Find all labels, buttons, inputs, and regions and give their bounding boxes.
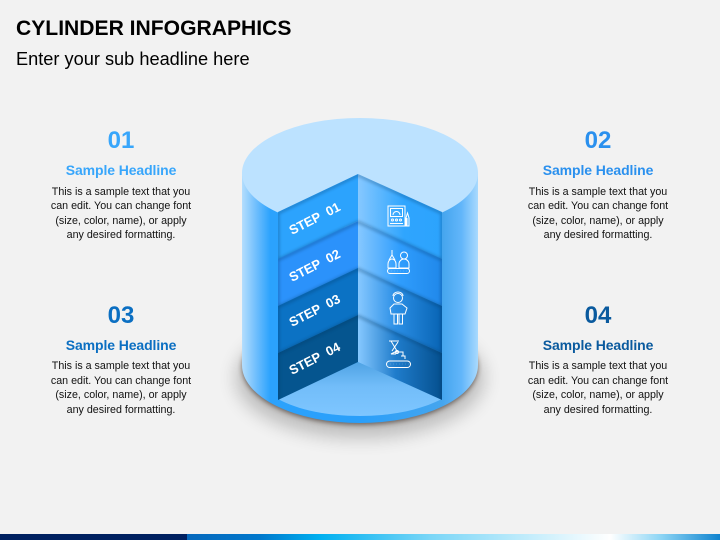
label step 03: STEP 03: [287, 291, 343, 330]
panel: step 01 text: [51, 127, 191, 241]
headline 01: Sample Headline: [66, 162, 176, 178]
headline 02: Sample Headline: [543, 162, 653, 178]
step 04 right panel: [358, 315, 442, 400]
label step 02: STEP 02: [287, 246, 343, 285]
body text 03: This is a sample text that you: [52, 360, 190, 372]
step 04 left panel: [278, 315, 358, 400]
body text 04: can edit. You can change font: [528, 374, 668, 386]
title: CYLINDER INFOGRAPHICS: [16, 17, 291, 40]
headline 04: Sample Headline: [543, 336, 653, 352]
panel: step 02 text: [528, 127, 668, 241]
body text 01: can edit. You can change font: [51, 200, 191, 212]
step 03 right panel: [358, 268, 442, 353]
body text 03: can edit. You can change font: [51, 374, 191, 386]
body text 01: This is a sample text that you: [52, 186, 190, 198]
body text 03: any desired formatting.: [67, 404, 175, 416]
notch panels: [278, 174, 442, 400]
body text 01: any desired formatting.: [67, 229, 175, 241]
step 01 right panel: [358, 174, 442, 259]
body text 02: any desired formatting.: [544, 229, 652, 241]
body text 02: (size, color, name), or apply: [532, 214, 664, 226]
body text 02: This is a sample text that you: [529, 186, 667, 198]
icon: robot arm on conveyor: [386, 341, 410, 368]
body text 03: [51, 360, 191, 416]
step 02 left panel: [278, 221, 358, 306]
icon: control panel: [388, 206, 409, 226]
top ellipse: [242, 118, 478, 228]
icon: worker with box: [390, 292, 407, 324]
navy segment: [0, 534, 187, 540]
cylinder shadow: [236, 309, 484, 438]
body text 02: [528, 186, 668, 241]
cylinder diagram: [228, 118, 492, 446]
step 03 left panel: [278, 268, 358, 353]
step 02 right panel: [358, 221, 442, 306]
headline 03: Sample Headline: [66, 336, 176, 352]
body text 01: [51, 186, 191, 241]
label step 04: STEP 04: [287, 339, 343, 378]
bottom bar: [0, 534, 720, 540]
body text 04: [528, 360, 668, 416]
body text 04: any desired formatting.: [544, 404, 652, 416]
number 01: 01: [108, 127, 134, 154]
body text 04: (size, color, name), or apply: [532, 389, 664, 401]
cylinder floor: [278, 362, 442, 416]
number 02: 02: [585, 127, 611, 154]
label step 01: STEP 01: [287, 199, 343, 238]
step 01 left panel: [278, 174, 358, 259]
subtitle: Enter your sub headline here: [16, 49, 250, 69]
fold shadows: [278, 175, 442, 400]
body text 04: This is a sample text that you: [529, 360, 667, 372]
body text 03: (size, color, name), or apply: [55, 389, 187, 401]
cylinder body: [242, 172, 478, 423]
panel: step 04 text: [528, 302, 668, 416]
icon: conveyor with bottles: [388, 250, 410, 274]
body text 01: (size, color, name), or apply: [55, 214, 187, 226]
body text 02: can edit. You can change font: [528, 200, 668, 212]
step labels: [287, 199, 343, 378]
number 04: 04: [585, 302, 611, 328]
panel: step 03 text: [51, 302, 191, 416]
number 03: 03: [108, 302, 134, 328]
